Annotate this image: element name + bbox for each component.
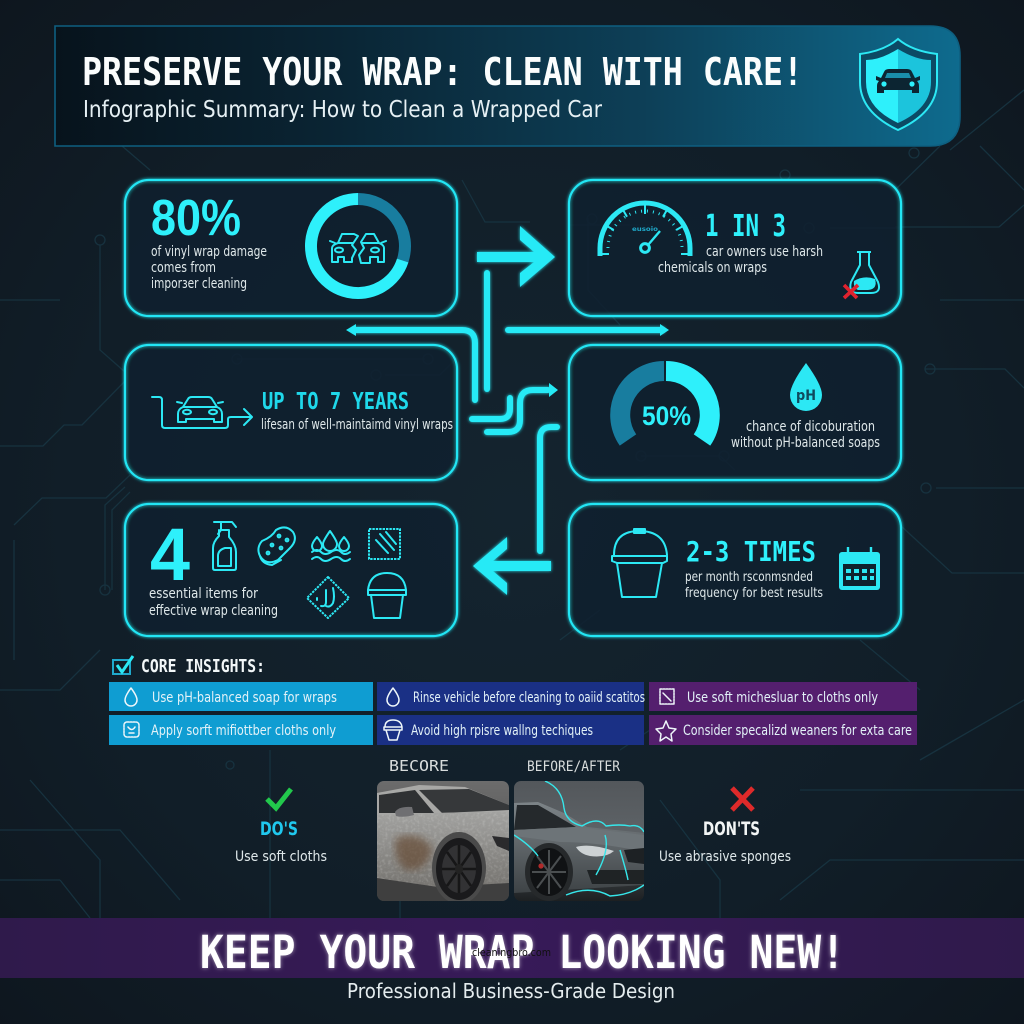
icon: pH drop: pH — [796, 388, 816, 404]
insight: pH soap: Use pH-balanced soap for wraps — [152, 690, 337, 706]
chart: gauge — [600, 203, 690, 256]
photo label: before/after: BEFORE/AFTER — [527, 759, 621, 775]
icon: calendar — [839, 547, 880, 590]
photo label: before: BECORE — [389, 757, 449, 775]
insight: avoid high pressure: Avoid high rpisre wallng techiques — [411, 723, 593, 739]
description: 50%: without pH-balanced soaps — [731, 435, 880, 451]
icon: flask with red cross — [844, 252, 879, 298]
insight: soft cloths: Use soft michesluar to cloths only — [687, 690, 878, 706]
don'ts column: Use abrasive sponges — [659, 849, 791, 865]
don'ts column: DON'TS — [703, 818, 760, 840]
heading: core insights: CORE INSIGHTS: — [141, 656, 265, 677]
icon: pH drop — [790, 363, 822, 411]
description: 1 in 3: chemicals on wraps — [658, 260, 767, 276]
arrow: big right arrow — [477, 226, 555, 287]
panel: 50% discolouration — [569, 345, 901, 480]
icon: bucket small — [368, 573, 406, 618]
icon: shield with car — [860, 39, 937, 130]
insight: rinse: Rinse vehicle before cleaning to oaiid scatitos — [413, 690, 645, 706]
icon: crashed cars — [330, 234, 386, 263]
description: frequency — [685, 569, 823, 601]
arrow: horizontal right arrow — [508, 324, 669, 336]
insight: avoid high pressure — [377, 715, 644, 745]
chart: donut 80 percent — [311, 199, 405, 293]
panel: up to 7 years — [125, 345, 457, 480]
arrow: s-curve right arrow — [487, 383, 558, 432]
description: 80% — [151, 244, 267, 292]
description: 1 in 3 — [658, 244, 823, 276]
stat: 1 in 3: 1 IN 3 — [705, 209, 786, 244]
panel: 80% damage — [125, 180, 457, 316]
icon: bucket large — [612, 529, 667, 597]
description: 1 in 3: car owners use harsh — [706, 244, 823, 260]
insight: specialized cleaners — [649, 715, 917, 745]
icon: spray bottle — [213, 522, 236, 570]
insight: microfibre — [109, 715, 373, 745]
heading: core insights — [113, 656, 265, 677]
description: 4 essentials: essential items for — [149, 586, 258, 602]
arrow: left arrow from panel — [473, 427, 557, 595]
stat: 50%: 50% — [642, 401, 691, 431]
icon: sponge — [258, 527, 295, 565]
description: 80%: comes from — [151, 260, 216, 276]
panel: 1 in 3 — [569, 180, 901, 316]
do's column: Use soft cloths — [235, 849, 327, 865]
icon: microfibre cloth — [369, 529, 400, 559]
photo: clean car with glow lines — [514, 781, 644, 901]
icon: folded cloth diamond — [307, 577, 349, 618]
stat: 80%: 80% — [151, 189, 241, 246]
insight: soft cloths — [649, 682, 917, 711]
description: lifespan: lifesan of well-maintaimd vinyl wraps — [261, 417, 453, 433]
stat: up to 7 years: UP TO 7 YEARS — [262, 389, 409, 415]
don'ts column — [659, 788, 791, 865]
insight: specialized cleaners: Consider specalizd weaners for exta care — [683, 723, 912, 739]
stat: 2-3 times: 2-3 TIMES — [686, 535, 816, 568]
stat: 4: 4 — [150, 513, 190, 596]
footer headline: KEEP YOUR WRAP LOOKING NEW! — [200, 926, 845, 979]
arrow: vertical line — [484, 273, 490, 389]
arrow: short bend — [472, 398, 510, 419]
panel: insights grid — [109, 682, 917, 745]
chart: half gauge 50% — [620, 371, 710, 440]
description: 4 essentials: effective wrap cleaning — [149, 603, 278, 619]
photo: dirty car — [377, 781, 509, 904]
icon: checkbox — [113, 656, 133, 674]
header banner — [55, 26, 960, 146]
description: frequency: frequency for best results — [685, 585, 823, 601]
insight: rinse — [377, 682, 645, 711]
insight: microfibre: Apply sorft mifiottber cloths only — [151, 723, 336, 739]
subtitle: Infographic Summary: How to Clean a Wrapped Car — [83, 97, 602, 123]
arrow: curved left arrow — [346, 324, 475, 400]
do's column — [235, 789, 327, 865]
description: frequency: per month rsconmsnded — [685, 569, 813, 585]
watermark: cleaningbro.com — [472, 946, 551, 959]
icon: water drops and waves — [312, 531, 350, 561]
description: 50%: chance of dicoburation — [746, 419, 875, 435]
panel: 2-3 times — [569, 504, 901, 636]
chart: gauge: eusoio — [632, 225, 659, 233]
icon: green check — [267, 789, 291, 808]
icon: red cross — [732, 788, 753, 810]
description: 80%: of vinyl wrap damage — [151, 244, 267, 260]
description: 4 essentials — [149, 586, 278, 619]
insight: pH soap — [109, 682, 373, 711]
footer tagline: Professional Business-Grade Design — [347, 979, 675, 1003]
footer band — [0, 918, 1024, 979]
panel: 4 essential items — [125, 504, 457, 636]
do's column: DO'S — [260, 818, 298, 840]
icon: car on route line — [152, 397, 252, 428]
description: 80%: imporзer cleaning — [151, 276, 247, 292]
description: 50% — [731, 419, 880, 451]
title: PRESERVE YOUR WRAP: CLEAN WITH CARE! — [82, 50, 803, 94]
